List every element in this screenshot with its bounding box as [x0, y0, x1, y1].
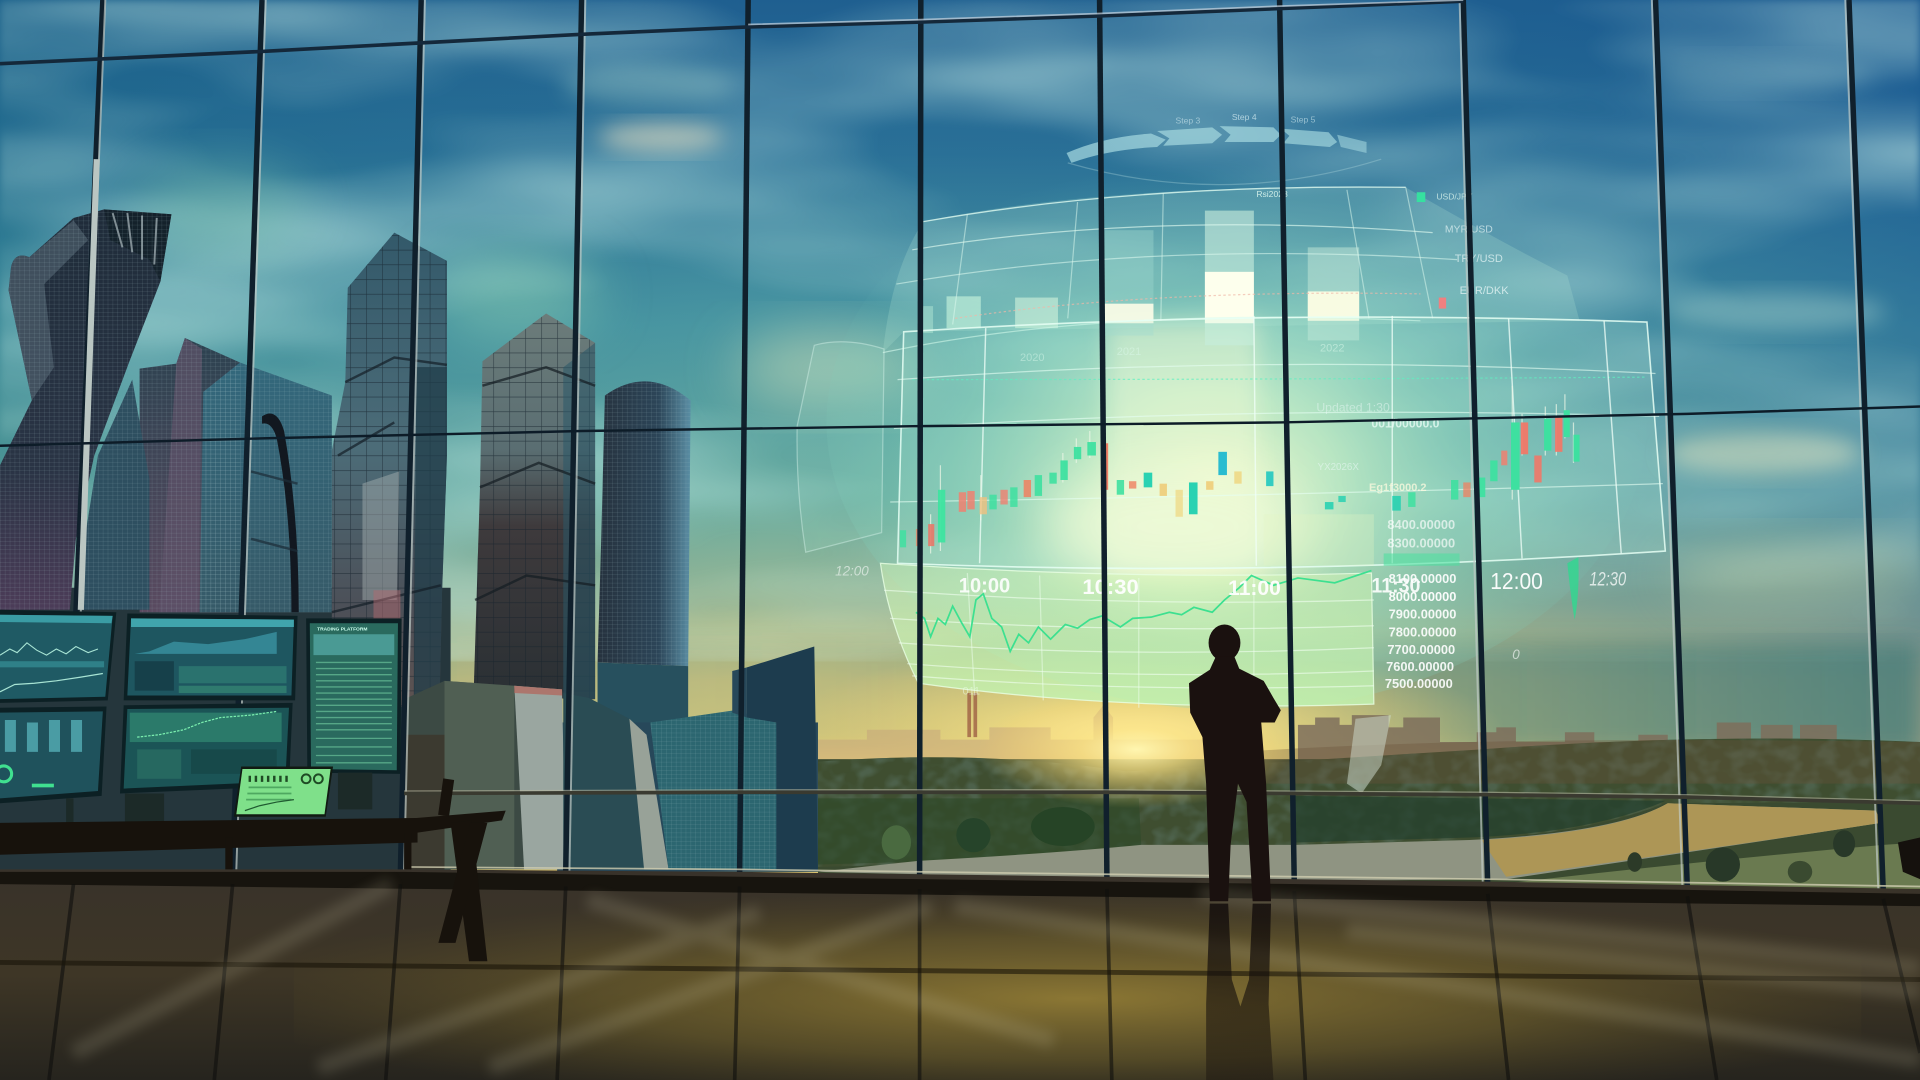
twisted tower lower wing: [73, 380, 149, 610]
time axis labels: 11:00: [1228, 577, 1281, 600]
main candlestick band: Eg1f3000.2: [1369, 482, 1427, 494]
frame mullion: light left post: [81, 159, 97, 610]
frame rail: sill highlight: [404, 867, 1920, 887]
price axis labels: 8100.00000: [1389, 571, 1456, 586]
floor with reflections and light rays: [0, 869, 1920, 1080]
upper bar chart panel: EUR/DKK: [1460, 285, 1509, 297]
price axis labels: 8300.00000: [1387, 535, 1455, 550]
price axis labels: 7500.00000: [1385, 676, 1453, 691]
left side panel: [797, 342, 884, 552]
time axis labels: 10:30: [1082, 576, 1139, 599]
forest: [818, 738, 1920, 867]
frame rail: top highlight: [748, 0, 1463, 24]
monitor: bottom left: [0, 707, 107, 803]
trading desk monitors: [0, 610, 506, 961]
main candlestick band: 001/00000.0: [1371, 416, 1440, 430]
tower: central stacked block: [474, 313, 595, 700]
upper bar chart panel: 2020: [1020, 352, 1045, 364]
price axis labels: 8000.00000: [1389, 589, 1456, 604]
frame rail: middle: [0, 407, 1920, 446]
silhouette: man standing with arms crossed: [1189, 624, 1281, 901]
price axis labels: 7600.00000: [1386, 659, 1454, 674]
upper bar chart panel: TRY/USD: [1455, 253, 1503, 265]
hologram glow: [827, 135, 1647, 710]
ground base: [818, 759, 1920, 888]
tower: rear capital block: [140, 338, 332, 612]
tower: round: [598, 381, 691, 722]
time axis labels: 11:30: [1371, 575, 1420, 598]
price axis labels: 7900.00000: [1389, 606, 1456, 621]
time axis labels: 10:00: [959, 575, 1010, 598]
monitor: vertical table: TRADING PLATFORM: [317, 627, 367, 633]
monitor stands: [66, 773, 372, 825]
holographic display sphere: [797, 112, 1665, 710]
frame rail: lower highlight: [404, 790, 1920, 801]
lower line-chart panel: [880, 514, 1374, 708]
sun flare on the horizon: [977, 691, 1296, 808]
monitor: vertical table: [306, 618, 402, 774]
top step ring: Step 5: [1291, 114, 1316, 124]
time axis labels: 12:30: [1589, 568, 1626, 590]
upper bar chart panel: Rsi2028: [1256, 189, 1288, 199]
price axis labels: 8400.00000: [1387, 517, 1455, 532]
monitor: top center: [124, 613, 298, 700]
edge silhouette on the right: [1898, 838, 1920, 879]
price axis labels: 7800.00000: [1389, 625, 1456, 640]
time axis labels: 12:00: [1490, 568, 1543, 594]
time axis labels: 12:00: [835, 564, 869, 579]
desk silhouette: [0, 778, 506, 961]
low-rise podium buildings: [402, 647, 818, 872]
glass reflection shard: [1347, 715, 1391, 793]
main candlestick band: Updated 1:30: [1316, 400, 1390, 414]
bright vertical light column: [1107, 321, 1259, 572]
lower line-chart panel: 011: [962, 685, 980, 697]
city towers on the left: [0, 209, 818, 872]
candlestick chart: [900, 386, 1580, 553]
right candlestick tail: [1567, 557, 1579, 620]
tower: twisted skyscraper: [0, 209, 171, 610]
time axis labels: [835, 564, 1626, 662]
upper bar chart panel: [883, 187, 1580, 364]
laptop screen: [234, 767, 333, 817]
upper bar chart panel: USD/JPY: [1436, 192, 1473, 202]
upper bar chart panel: MYR/USD: [1445, 225, 1493, 236]
tower: tall blue block: [332, 233, 447, 710]
price axis labels: 7700.00000: [1387, 642, 1455, 657]
monitor: bottom center: [120, 703, 293, 793]
top step ring: [1067, 112, 1381, 185]
hologram hot spot: [1041, 468, 1310, 585]
frame rail: lower: [404, 792, 1920, 803]
price axis labels: [1384, 517, 1460, 691]
hazy skyline: east: [1298, 715, 1898, 765]
top step ring: Step 4: [1232, 112, 1257, 122]
river: [818, 803, 1881, 882]
frame rail: top: [0, 1, 1463, 64]
main candlestick band: [890, 316, 1665, 568]
upper bar chart panel: 2022: [1320, 342, 1345, 354]
reflection of the man on the floor: [1206, 904, 1273, 1080]
hazy skyline: west: [818, 705, 1236, 765]
time axis labels: 0: [1512, 647, 1520, 662]
upper bar chart panel: 2021: [1117, 346, 1141, 358]
block behind the desk: [0, 588, 451, 872]
main candlestick band: YX2026X: [1318, 462, 1359, 473]
distant city skyline and forest: [818, 691, 1920, 889]
top step ring: Step 3: [1176, 116, 1201, 126]
monitor: top left: [0, 610, 116, 703]
far bank meadow: [1500, 842, 1920, 889]
